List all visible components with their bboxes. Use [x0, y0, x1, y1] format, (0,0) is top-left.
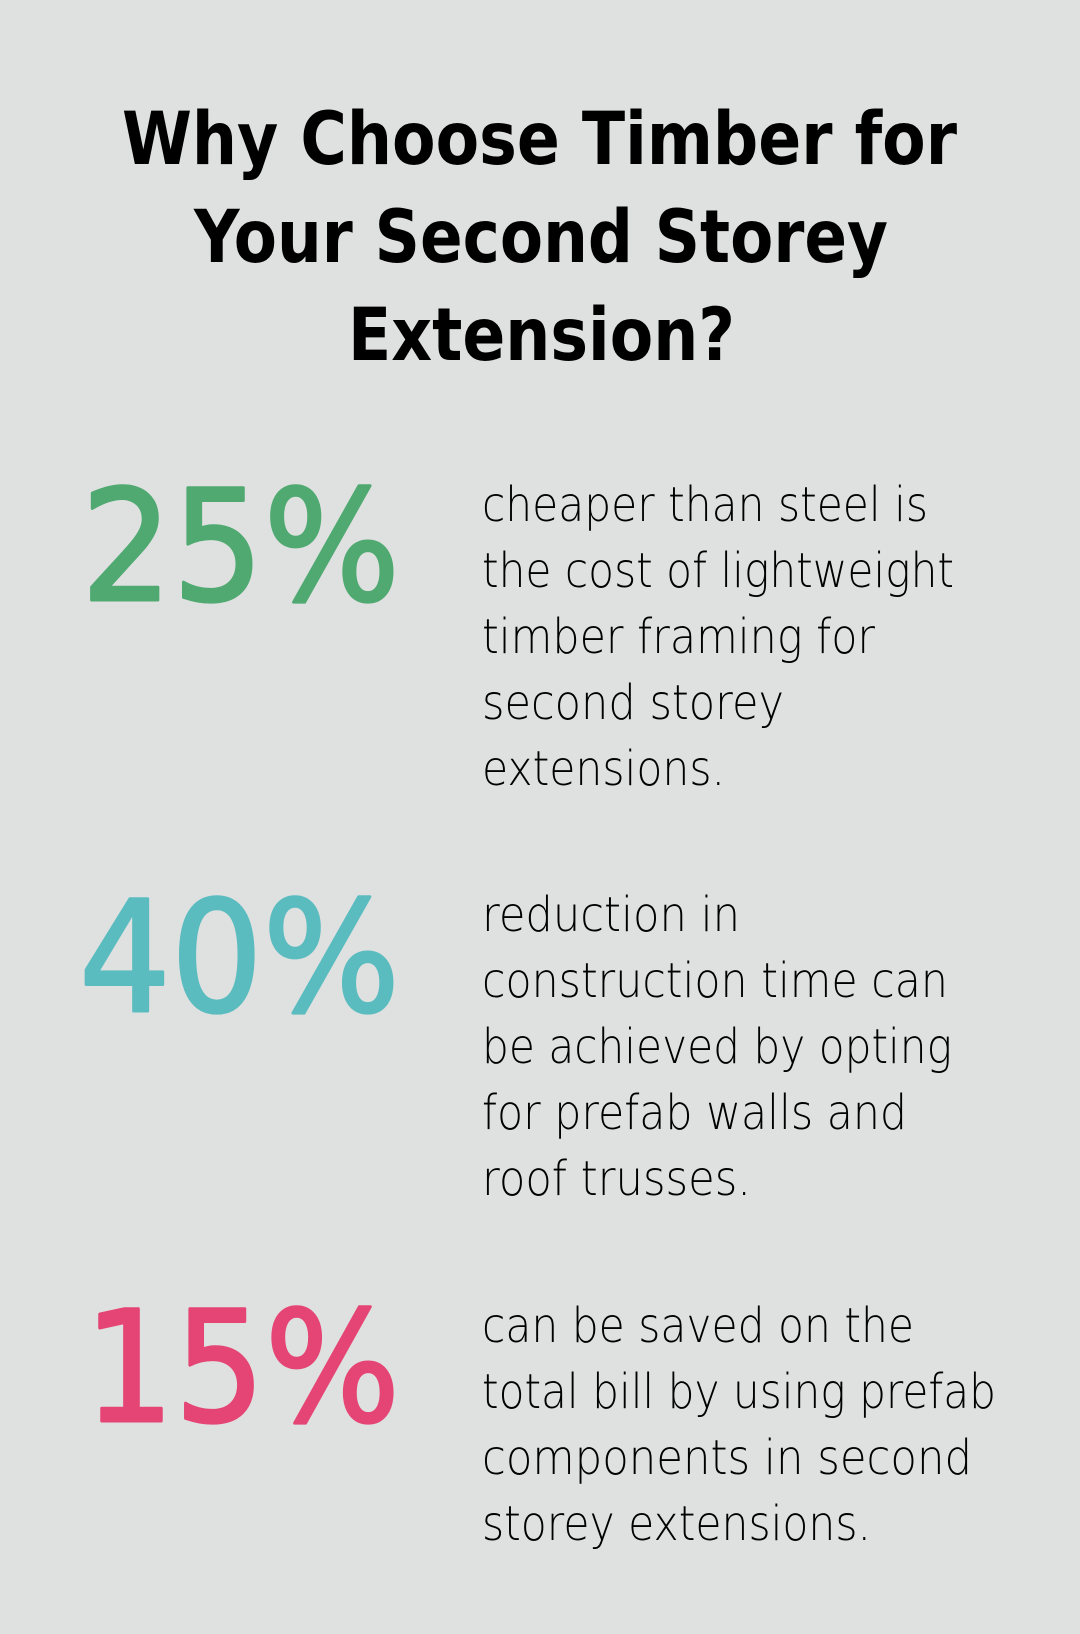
text block: 25% description: timber framing for — [482, 609, 875, 665]
text block: 15% description — [482, 1298, 996, 1552]
text block: 40% description: reduction in — [482, 887, 740, 943]
text block: 15% description: total bill by using prefab — [482, 1364, 996, 1420]
text block: 25% description: cheaper than steel is — [482, 477, 928, 533]
stat: 25%: 25% — [81, 458, 400, 637]
text block: 25% description: second storey — [482, 675, 784, 731]
text block: 25% description: the cost of lightweight — [482, 543, 954, 599]
text block: 15% description: can be saved on the — [482, 1298, 914, 1354]
text block: 25% description — [482, 477, 954, 797]
title — [122, 97, 957, 378]
text block: 40% description: construction time can — [482, 953, 948, 1009]
text block: 25% description: extensions. — [482, 741, 725, 797]
text block: 40% description: roof trusses. — [482, 1151, 751, 1207]
text block: 40% description — [482, 887, 952, 1207]
stat: 15%: 15% — [84, 1279, 400, 1458]
title: Why Choose Timber for — [122, 97, 957, 182]
text block: 40% description: be achieved by opting — [482, 1019, 952, 1075]
text block: 15% description: components in second — [482, 1430, 972, 1486]
stat: 40%: 40% — [79, 869, 400, 1048]
panel: 25% cheaper than steel — [81, 458, 954, 797]
title: Your Second Storey — [193, 195, 888, 280]
panel: 15% total bill saving — [84, 1279, 996, 1552]
text block: 40% description: for prefab walls and — [482, 1085, 907, 1141]
title: Extension? — [348, 293, 735, 378]
panel: 40% construction time — [79, 869, 952, 1207]
text block: 15% description: storey extensions. — [482, 1496, 871, 1552]
